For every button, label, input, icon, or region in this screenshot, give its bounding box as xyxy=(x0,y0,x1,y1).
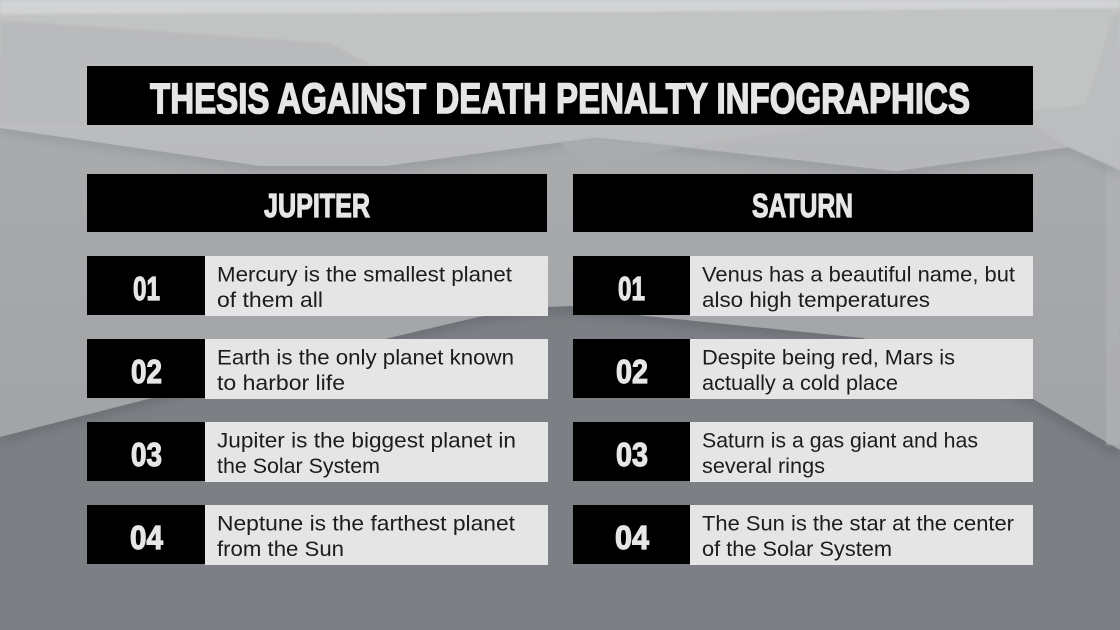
heading: Jupiter xyxy=(87,174,547,232)
row 02: Earth: Earth is the only planet known xyxy=(217,346,514,370)
row 04: Sun xyxy=(573,505,1033,565)
row 03: Jupiter xyxy=(87,422,548,482)
row 04: Neptune: from the Sun xyxy=(217,538,344,561)
row 03: Jupiter: the Solar System xyxy=(217,455,380,478)
row 02: Earth: 02 xyxy=(131,353,162,390)
row 03: Saturn: Saturn is a gas giant and has xyxy=(702,430,978,452)
row 02: Mars: 02 xyxy=(616,353,648,390)
heading: Saturn xyxy=(573,174,1033,232)
row 01: Venus: also high temperatures xyxy=(702,289,930,312)
row 04: Sun: of the Solar System xyxy=(702,538,892,561)
row 02: Earth xyxy=(87,339,548,399)
row 01: Venus: 01 xyxy=(618,270,645,307)
panel: Jupiter column xyxy=(87,174,548,565)
row 02: Mars: Despite being red, Mars is xyxy=(702,346,955,370)
row 04: Neptune: 04 xyxy=(130,519,164,556)
row 03: Jupiter: 03 xyxy=(131,436,162,473)
row 02: Mars: actually a cold place xyxy=(702,372,898,395)
row 04: Neptune: Neptune is the farthest planet xyxy=(217,512,515,536)
row 02: Earth: to harbor life xyxy=(217,372,345,395)
row 01: Mercury: 01 xyxy=(133,270,160,307)
row 01: Mercury: Mercury is the smallest planet xyxy=(217,264,512,286)
heading: Jupiter: JUPITER xyxy=(264,187,370,224)
row 02: Mars xyxy=(573,339,1033,399)
row 01: Mercury xyxy=(87,256,548,316)
row 03: Saturn: several rings xyxy=(702,455,825,478)
row 01: Mercury: of them all xyxy=(217,289,323,312)
row 03: Jupiter: Jupiter is the biggest planet in xyxy=(217,430,516,452)
row 01: Venus xyxy=(573,256,1033,316)
row 01: Venus: Venus has a beautiful name, but xyxy=(702,264,1015,286)
row 04: Sun: The Sun is the star at the center xyxy=(702,512,1014,536)
row 04: Neptune xyxy=(87,505,548,565)
heading: Saturn: SATURN xyxy=(752,187,853,224)
panel: Saturn column xyxy=(573,174,1033,565)
row 03: Saturn: 03 xyxy=(616,436,648,473)
row 03: Saturn xyxy=(573,422,1033,482)
row 04: Sun: 04 xyxy=(615,519,650,556)
